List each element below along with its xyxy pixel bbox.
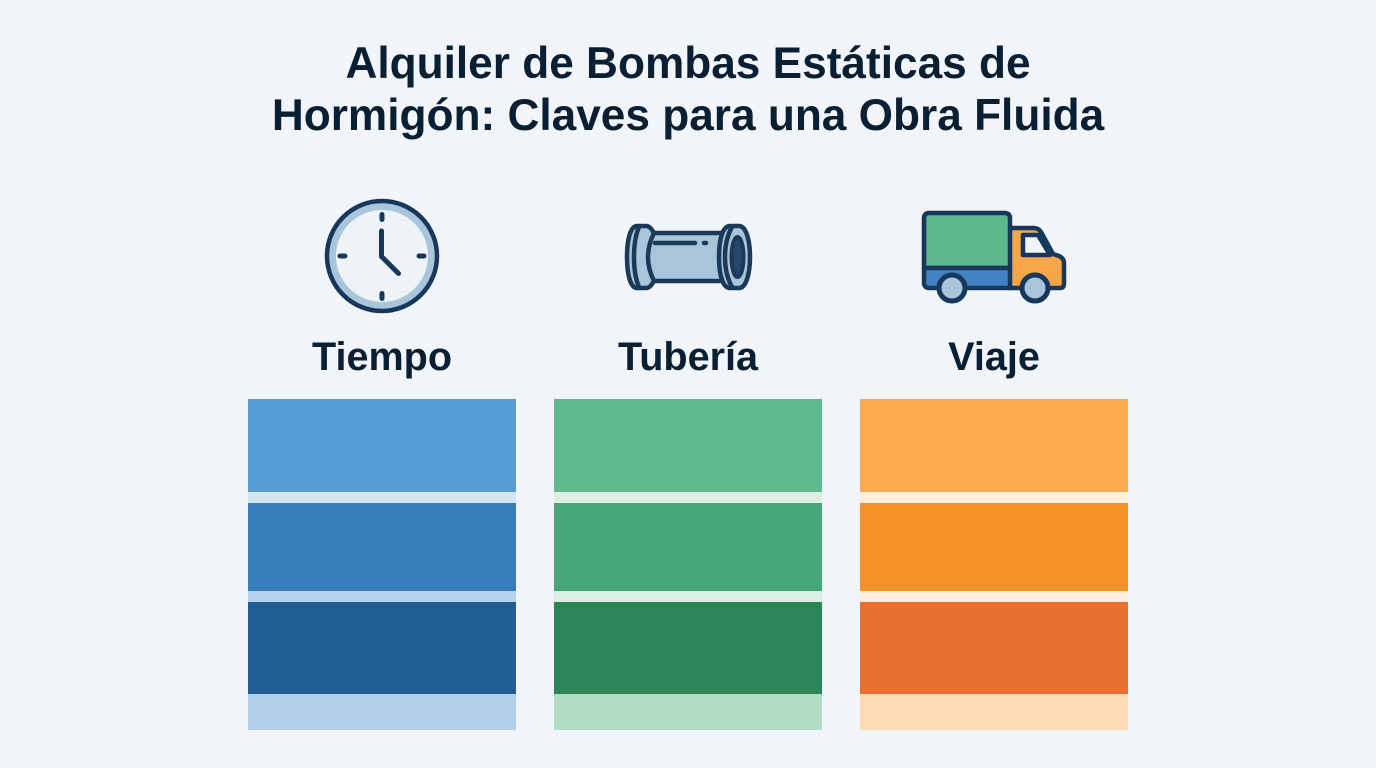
title: Alquiler de Bombas Estáticas de [345, 39, 1031, 88]
heading: Tubería: Tubería [618, 335, 758, 379]
panel: orange column [860, 399, 1128, 730]
heading: Viaje: Viaje [948, 335, 1040, 379]
icon: clock [324, 198, 440, 314]
icon: truck [922, 210, 1066, 304]
title [272, 39, 1104, 140]
title: Hormigón: Claves para una Obra Fluida [272, 91, 1104, 140]
icon: pipe [624, 224, 752, 290]
heading: Tiempo: Tiempo [312, 335, 452, 379]
panel: blue column [248, 399, 516, 730]
panel: green column [554, 399, 822, 730]
